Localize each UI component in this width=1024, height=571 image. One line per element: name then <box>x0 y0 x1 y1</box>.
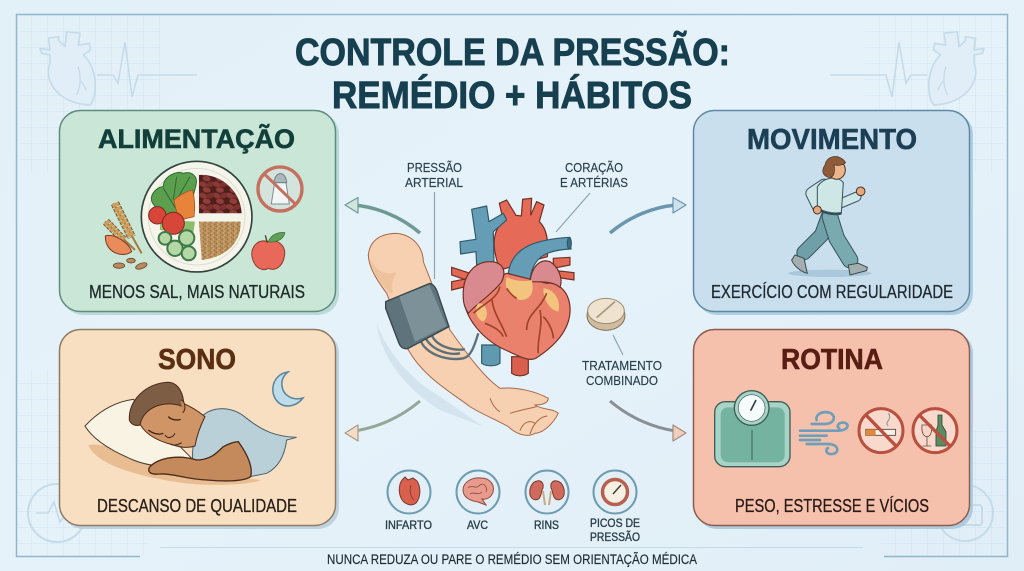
arrow: to movimento <box>610 198 686 233</box>
panel: alimentação <box>60 110 339 315</box>
caption: movimento: EXERCÍCIO COM REGULARIDADE <box>711 282 953 302</box>
heading: movimento: MOVIMENTO <box>747 124 917 156</box>
central illustration: arm, cuff and heart <box>368 198 574 435</box>
label: coração e artérias: E ARTÉRIAS <box>560 175 628 190</box>
label: tratamento combinado: COMBINADO <box>586 373 658 388</box>
icon: walking person <box>788 156 872 277</box>
label: pressão arterial: ARTERIAL <box>405 176 463 190</box>
title: CONTROLE DA PRESSÃO: <box>295 30 730 74</box>
arrow: to sono <box>345 401 420 441</box>
heading: alimentação: ALIMENTAÇÃO <box>98 123 295 154</box>
icon: plate of food <box>141 161 252 272</box>
caption: alimentação: MENOS SAL, MAIS NATURAIS <box>89 282 305 302</box>
label: coração e artérias: CORAÇÃO <box>565 161 623 175</box>
icon: no salt <box>258 167 302 211</box>
heading: rotina: ROTINA <box>781 344 883 376</box>
arrow: to alimentação <box>345 198 420 233</box>
label: avc: AVC <box>467 518 488 532</box>
label: pressão arterial <box>405 161 463 279</box>
heading: sono: SONO <box>158 344 236 376</box>
label: picos de pressão <box>590 516 640 544</box>
icon: moon <box>273 372 303 406</box>
title <box>295 30 730 117</box>
arrow: to rotina <box>610 401 686 441</box>
icon: no alcohol <box>913 409 957 453</box>
icon: heart <box>452 198 574 376</box>
icon: no smoking <box>859 409 903 453</box>
icon: wind <box>800 412 848 454</box>
icon: grains and nuts <box>105 203 148 271</box>
icon: sleeping person <box>85 382 297 485</box>
icon: apple <box>252 232 285 270</box>
icon: arm with blood-pressure cuff <box>368 233 558 435</box>
label: picos de pressão: PICOS DE <box>590 516 640 530</box>
icon: infarto <box>388 470 430 514</box>
caption: sono: DESCANSO DE QUALIDADE <box>97 496 297 516</box>
label: tratamento combinado <box>582 335 662 388</box>
icon: picos de pressão <box>594 470 636 514</box>
panel: movimento <box>694 110 973 315</box>
label: infarto: INFARTO <box>385 518 432 532</box>
panel: sono <box>60 330 339 529</box>
label: rins: RINS <box>534 518 559 532</box>
label: tratamento combinado: TRATAMENTO <box>582 358 662 373</box>
panel: rotina <box>694 330 973 529</box>
label: picos de pressão: PRESSÃO <box>590 530 640 544</box>
footer warning: NUNCA REDUZA OU PARE O REMÉDIO SEM ORIENTAÇÃO MÉDICA <box>327 552 697 567</box>
label: pressão arterial: PRESSÃO <box>407 161 462 175</box>
icon: rins <box>526 470 568 514</box>
icon: scale <box>715 391 790 467</box>
risk icons row <box>385 470 640 544</box>
icon: pill <box>587 298 625 330</box>
title: REMÉDIO + HÁBITOS <box>332 73 692 117</box>
label: coração e artérias <box>556 161 628 232</box>
icon: avc <box>456 470 500 514</box>
caption: rotina: PESO, ESTRESSE E VÍCIOS <box>735 496 929 516</box>
